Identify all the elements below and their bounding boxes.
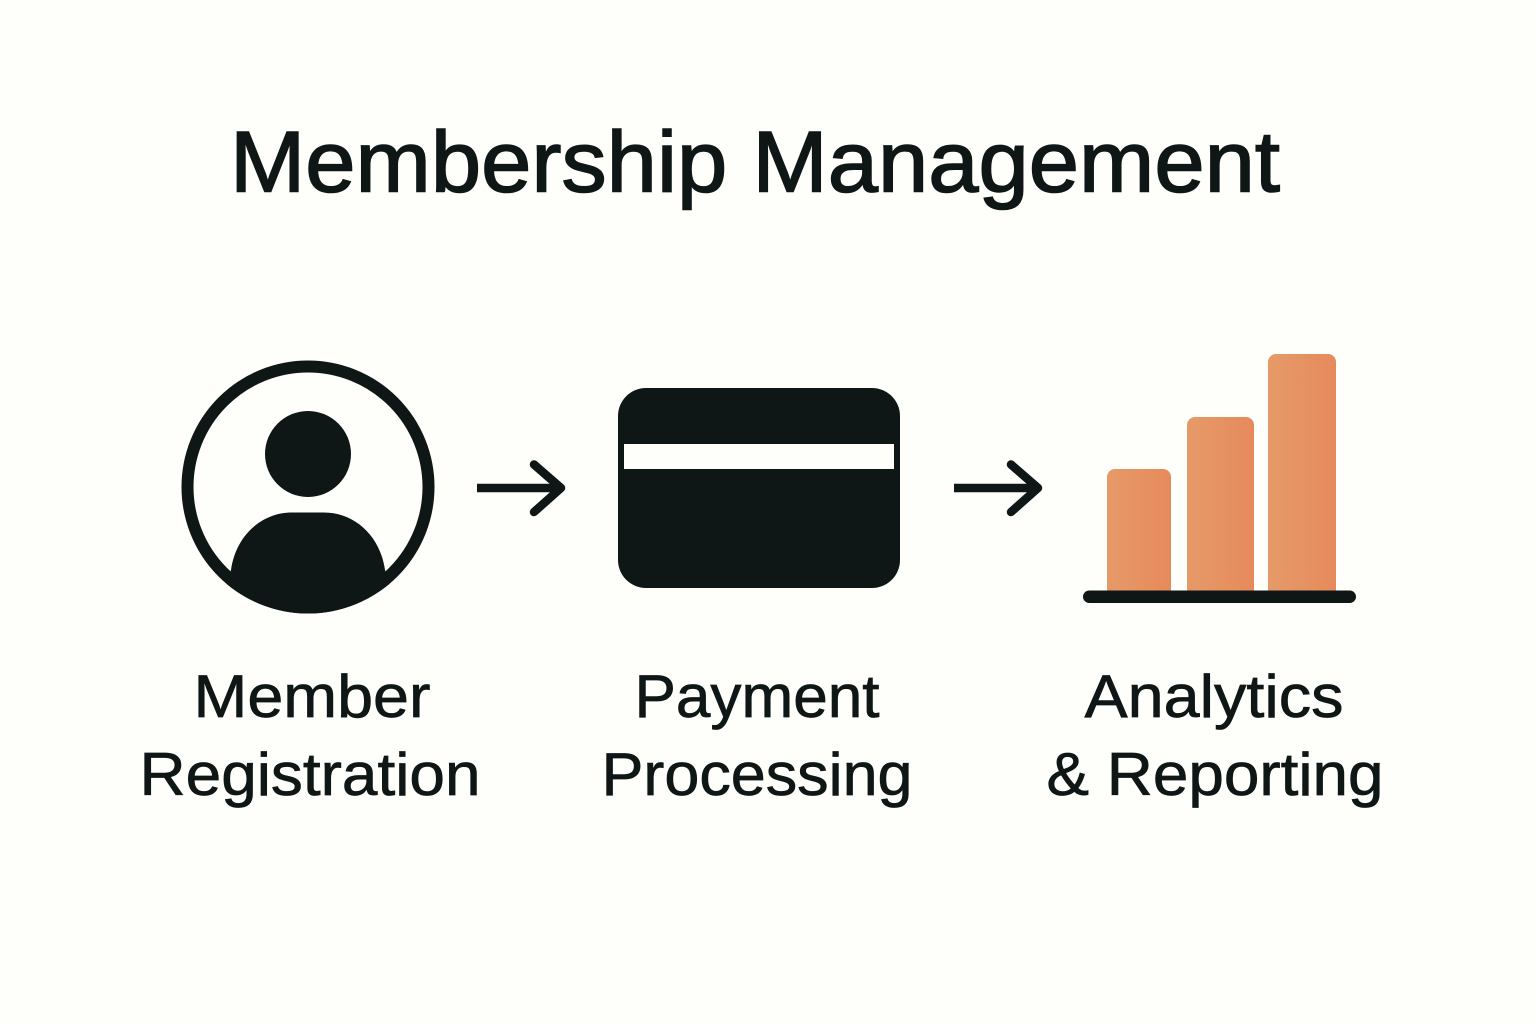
icon: payment card (618, 388, 900, 588)
label: member registration: Member (194, 663, 430, 730)
arrow: payment to analytics (954, 464, 1038, 512)
label: payment processing: Payment (634, 663, 880, 730)
label: member registration (140, 663, 480, 808)
icon: member (188, 366, 428, 620)
title: Membership Management (230, 114, 1280, 210)
label: analytics and reporting: & Reporting (1046, 741, 1384, 808)
label: payment processing (602, 663, 912, 808)
label: analytics and reporting (1046, 663, 1384, 808)
chart: analytics bars (1083, 354, 1356, 603)
label: analytics and reporting: Analytics (1084, 663, 1344, 730)
label: payment processing: Processing (602, 741, 912, 808)
arrow: registration to payment (477, 464, 561, 512)
label: member registration: Registration (140, 741, 480, 808)
